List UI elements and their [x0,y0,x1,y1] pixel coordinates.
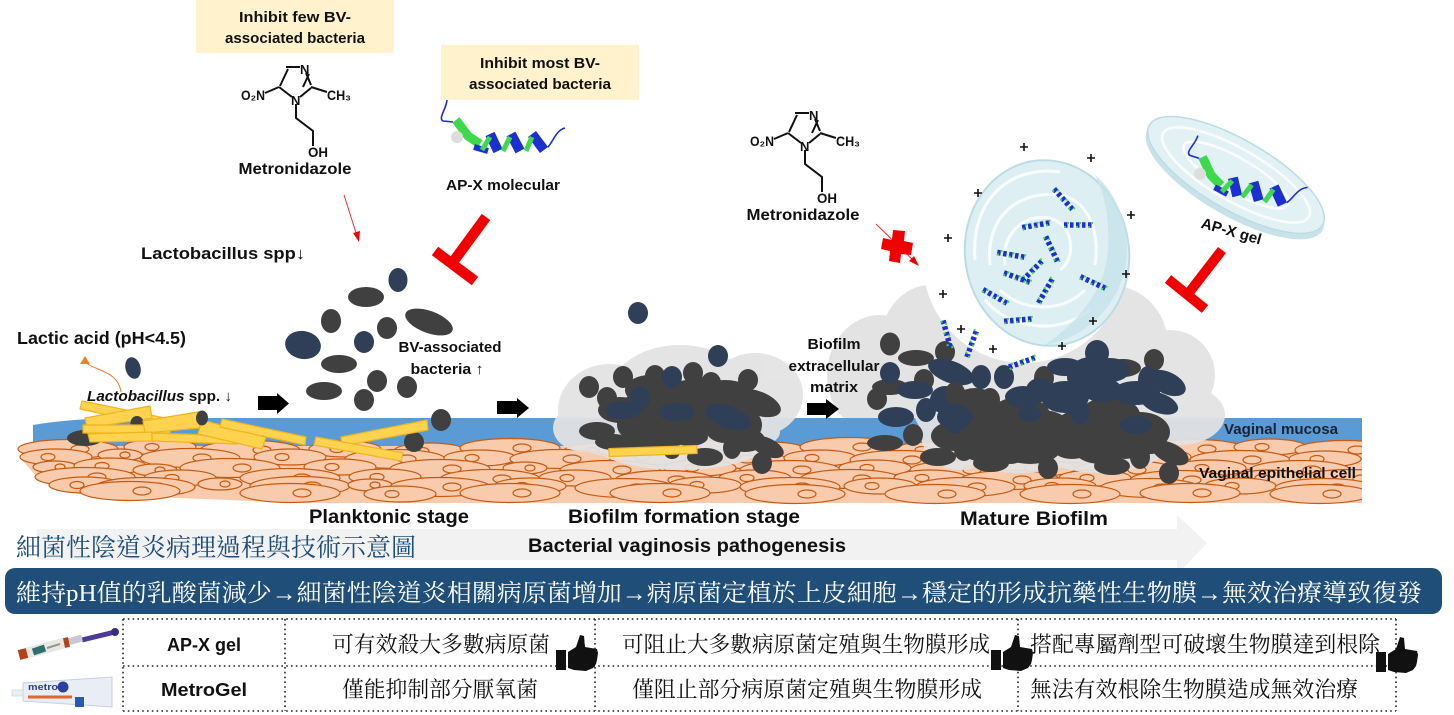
AP-X molecular label: AP-X molecular [446,177,560,194]
epithelial cell layer [18,438,1400,504]
mature biofilm [867,161,1225,484]
metronidazole structure right: O₂N [750,133,774,149]
lactobacillus rod in biofilm [609,445,697,457]
metronidazole structure left: OH [308,144,328,160]
blue process banner: 維持pH值的乳酸菌減少→細菌性陰道炎相關病原菌增加→病原菌定植於上皮細胞→穩定的形成抗藥性生物膜→無效治療導致復發 [16,580,1422,607]
vaginal epithelial cell label: Vaginal epithelial cell [1199,465,1356,482]
thin red arrow [344,195,360,242]
biofilm formation stage [553,302,803,474]
row: AP-X gel [167,632,1381,657]
metronidazole structure right: OH [817,190,837,206]
mucosa layer [33,418,1362,455]
row: AP-X gel: AP-X gel [167,635,241,655]
icon: MetroGel tube [12,677,112,707]
yellow rods [80,401,428,461]
comparison table [123,619,1396,711]
row: MetroGel: 僅能抑制部分厭氧菌 [342,677,538,702]
lactobacillus spp label: Lactobacillus spp↓ [141,245,305,263]
callout: inhibit few [196,0,394,53]
metronidazole structure left: CH₃ [327,87,351,103]
extracellular matrix cloud [910,285,1225,473]
metronidazole structure left: N [291,93,300,108]
metronidazole structure right [750,108,860,206]
icon: thumbs up 1 [556,635,598,671]
metronidazole label right: Metronidazole [746,207,860,224]
icon: MetroGel tube: metro [28,682,59,692]
positive charge signs [939,143,1135,353]
metronidazole label left: Metronidazole [238,161,352,178]
row: AP-X gel: 可有效殺大多數病原菌 [332,632,550,657]
AP-X peptide [441,100,565,151]
row: AP-X gel: 可阻止大多數病原菌定殖與生物膜形成 [622,632,990,657]
BV-associated label: BV-associated [398,339,502,356]
process arrows [258,393,839,419]
lactobacillus decrease label: Lactobacillus spp. ↓ [87,388,232,405]
metronidazole structure left: N [300,62,309,77]
stage label: planktonic: Planktonic stage [309,506,469,528]
callout: inhibit most: Inhibit most BV- [480,55,600,72]
biofilm matrix label [788,336,880,396]
AP-X gel disc [1130,95,1340,262]
callout: inhibit most [441,45,639,100]
gray progression arrow [37,515,1207,575]
chinese title: 細菌性陰道炎病理過程與技術示意圖 [16,534,416,562]
row: MetroGel: MetroGel [161,680,247,700]
stage label: biofilm formation: Biofilm formation stage [568,506,800,528]
row: MetroGel: 僅阻止部分病原菌定殖與生物膜形成 [632,677,982,702]
red inhibition T left [435,217,486,281]
peptide helices [941,188,1108,369]
blue process banner [5,568,1442,614]
callout: inhibit few: associated bacteria [225,30,366,47]
vaginal mucosa label: Vaginal mucosa [1224,421,1339,438]
row: AP-X gel: 搭配專屬劑型可破壞生物膜達到根除 [1030,632,1381,657]
bacteria mass [867,332,1192,484]
icon: thumbs up 2 [991,635,1033,671]
BV-associated label: bacteria ↑ [410,361,484,378]
callout: inhibit most: associated bacteria [469,76,612,93]
free bacteria [67,268,456,452]
lactic acid label: Lactic acid (pH<4.5) [17,328,186,348]
biofilm matrix label: matrix [810,379,859,396]
AP-X helix in gel [1182,134,1313,210]
BV-associated label [398,339,502,378]
metronidazole structure left [241,62,351,160]
metronidazole structure right: N [800,139,809,154]
biofilm matrix label: Biofilm [808,336,860,353]
metronidazole structure right: CH₃ [836,133,860,149]
metronidazole structure right: N [809,108,818,123]
metronidazole structure left: O₂N [241,87,265,103]
bacteria cluster [579,345,787,474]
pathogenesis label: Bacterial vaginosis pathogenesis [528,535,846,557]
icon: thumbs up 3 [1376,637,1418,673]
red blocked arrow [876,224,919,266]
stage label: mature: Mature Biofilm [960,508,1108,530]
clearing around gel [923,161,1125,363]
AP-X gel label: AP-X gel [1199,215,1263,248]
row: MetroGel: 無法有效根除生物膜造成無效治療 [1030,677,1358,702]
extracellular matrix cloud [553,345,803,470]
lactobacillus and planktonic bacteria [67,268,456,461]
biofilm matrix label: extracellular [788,358,880,375]
red inhibition T right [1168,250,1222,309]
planktonic bacterium above biofilm [628,302,648,324]
mature biofilm matrix, upper left lobes [827,285,980,435]
callout: inhibit few: Inhibit few BV- [239,9,351,26]
icon: AP-X syringe [19,628,119,655]
lactic acid arrow [80,356,121,392]
gel sphere with peptides [941,149,1141,369]
row: MetroGel [161,677,1358,702]
